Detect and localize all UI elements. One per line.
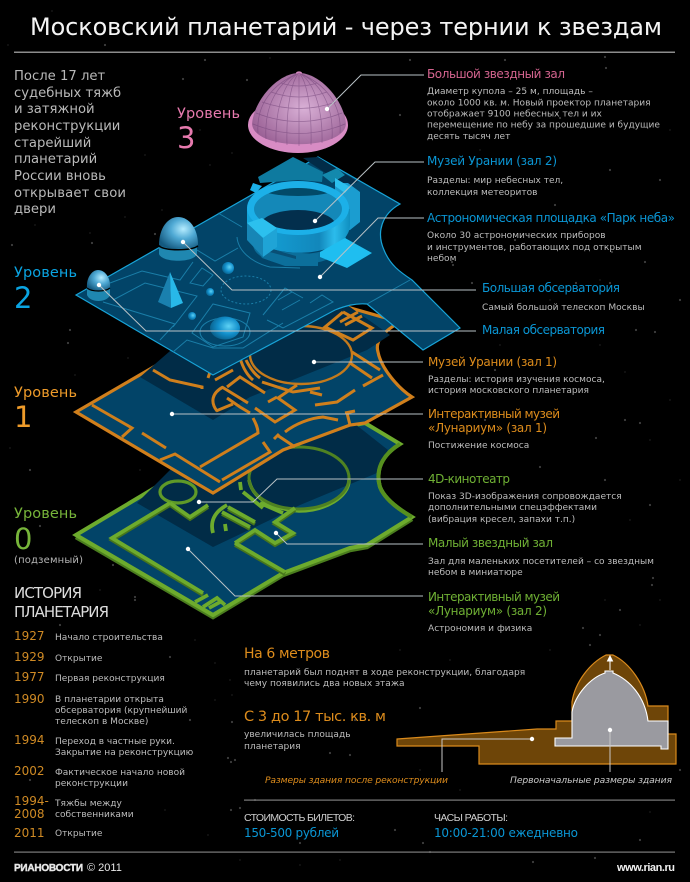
- callout: lunarium 2: [428, 590, 560, 634]
- history timeline: Закрытие на реконструкцию: [55, 748, 194, 758]
- fact: 6 metres: На 6 метров: [244, 646, 330, 662]
- level 0 label: 0: [14, 522, 32, 556]
- fact: 6 metres: планетарий был поднят в ходе реконструкции, благодаря: [244, 668, 525, 678]
- history timeline: Начало строительства: [55, 633, 163, 643]
- history timeline: 1929: [14, 650, 45, 664]
- fact: area: [244, 709, 386, 752]
- level 0 label: Уровень: [14, 506, 77, 522]
- history timeline: 1994: [14, 733, 45, 747]
- callout: small star hall: Малый звездный зал: [428, 536, 553, 550]
- level 2 label: [14, 265, 77, 315]
- history timeline: Фактическое начало новой: [55, 768, 185, 778]
- history timeline: 1927: [14, 629, 45, 643]
- level 1 plan: orange floor: [76, 300, 412, 493]
- footer url: www.rian.ru: [616, 862, 675, 874]
- callout: sky park: [427, 211, 675, 264]
- callout: urania hall 2: Разделы: мир небесных тел,: [427, 176, 563, 186]
- leader: big observatory: [181, 240, 476, 290]
- history timeline: собственниками: [55, 810, 134, 820]
- history timeline: обсерватория (крупнейший: [55, 706, 188, 716]
- opening hours: ЧАСЫ РАБОТЫ:: [434, 812, 508, 824]
- plan lines: [103, 213, 410, 352]
- callout: 4D: Показ 3D-изображения сопровождается: [428, 492, 622, 502]
- history heading: ИСТОРИЯ: [14, 584, 82, 602]
- callout: 4D: 4D-кинотеатр: [428, 472, 510, 486]
- orange walls: [92, 312, 383, 482]
- history timeline: телескоп в Москве): [55, 717, 148, 727]
- callout: big observatory: Большая обсерватория: [482, 281, 620, 295]
- callout: urania hall 1: история московского планетария: [428, 386, 589, 396]
- callout: 4D: [428, 472, 622, 525]
- intro text: и затяжной: [14, 102, 95, 117]
- level 3 label: 3: [177, 121, 195, 155]
- callout: urania hall 1: Разделы: история изучения космоса,: [428, 375, 605, 385]
- history timeline: Тяжбы между: [54, 799, 123, 809]
- history timeline: 2011: [14, 826, 45, 840]
- green walls: shaded side: [112, 505, 295, 595]
- level 0 label: (подземный): [14, 555, 83, 566]
- intro text: [14, 69, 126, 217]
- fact: 6 metres: [244, 646, 525, 689]
- level 1 label: [14, 385, 77, 434]
- level 2 label: Уровень: [14, 265, 77, 281]
- history timeline: [14, 629, 194, 840]
- intro text: судебных тяжб: [14, 85, 121, 101]
- intro text: двери: [14, 202, 56, 217]
- level 3 label: Уровень: [177, 106, 240, 122]
- title: Московский планетарий - через тернии к звездам: [30, 13, 662, 41]
- intro text: открывает свои: [14, 186, 126, 201]
- leader: urania hall 2: [313, 162, 424, 223]
- label: original size: Первоначальные размеры здания: [510, 775, 672, 786]
- callout: sky park: и инструментов, работающих под открытым: [427, 243, 642, 253]
- history timeline: 1990: [14, 692, 45, 706]
- callout: sky park: небом: [427, 254, 456, 264]
- building cross-section: [397, 655, 676, 764]
- level 0 label: [14, 506, 83, 566]
- callout: lunarium 2: «Лунариум» (зал 2): [428, 604, 547, 618]
- opening hours: 10:00-21:00 ежедневно: [434, 826, 578, 840]
- callout: lunarium 1: Интерактивный музей: [428, 407, 560, 421]
- fact: area: увеличилась площадь: [244, 730, 351, 740]
- level 1 label: 1: [14, 400, 32, 434]
- history timeline: Первая реконструкция: [55, 674, 165, 684]
- footer logo: РИАНОВОСТИ: [14, 863, 83, 874]
- leader: big star hall: [325, 75, 424, 111]
- level 0 plan: green floor: [76, 420, 412, 617]
- callout: lunarium 1: Постижение космоса: [428, 441, 529, 451]
- intro text: реконструкции: [14, 119, 120, 134]
- intro text: После 17 лет: [14, 69, 105, 84]
- history timeline: Открытие: [55, 654, 103, 664]
- leader: original size: [608, 728, 612, 772]
- label: size after reconstruction: Размеры здания после реконструкции: [265, 775, 448, 786]
- opening hours: [434, 812, 578, 840]
- callout: big observatory: Самый большой телескоп Москвы: [482, 303, 645, 313]
- callout: urania hall 2: Музей Урании (зал 2): [427, 154, 557, 168]
- history timeline: Переход в частные руки.: [55, 737, 175, 747]
- leader: lunarium 1: [170, 412, 423, 416]
- small observatory: [87, 270, 110, 301]
- callout: sky park: Астрономическая площадка «Парк неба»: [427, 211, 675, 225]
- history timeline: реконструкции: [55, 779, 128, 789]
- callout: big observatory: [482, 281, 645, 313]
- museum building: [247, 157, 372, 268]
- rule above tickets: [244, 800, 675, 801]
- leader: 4D: [197, 479, 423, 504]
- level 1 label: Уровень: [14, 385, 77, 401]
- fact: area: С 3 до 17 тыс. кв. м: [244, 709, 386, 725]
- callout: urania hall 2: [427, 154, 563, 198]
- callout: small star hall: [428, 536, 654, 578]
- leader: lunarium 2: [186, 547, 423, 596]
- callout: lunarium 1: «Лунариум» (зал 1): [428, 421, 547, 435]
- callout: urania hall 1: Музей Урании (зал 1): [428, 355, 557, 369]
- callout: big star hall: [427, 67, 660, 142]
- callout: big star hall: перемещение по небу за прошедшие и будущие: [427, 120, 660, 130]
- intro text: старейший: [14, 136, 91, 151]
- footer logo: © 2011: [87, 862, 122, 874]
- history timeline: В планетарии открыта: [55, 695, 164, 705]
- leader: small star hall: [274, 531, 423, 544]
- history timeline: Открытие: [55, 829, 103, 839]
- history timeline: 2008: [14, 807, 45, 821]
- callout: urania hall 2: коллекция метеоритов: [427, 188, 537, 198]
- green walls: [112, 482, 295, 608]
- intro text: России вновь: [14, 169, 106, 184]
- pyramid: [158, 272, 183, 308]
- intro text: планетарий: [14, 152, 97, 167]
- large observatory: [159, 217, 198, 261]
- dome: large star hall: [248, 71, 348, 153]
- arrow: raised by 6 metres: [608, 656, 612, 670]
- callout: lunarium 2: Астрономия и физика: [428, 624, 532, 634]
- callout: 4D: (вибрация кресел, запахи т.п.): [428, 515, 575, 525]
- callout: big star hall: Диаметр купола – 25 м, площадь –: [427, 87, 593, 97]
- callout: big star hall: десять тысяч лет: [427, 132, 510, 142]
- footer rule: [14, 852, 675, 853]
- callout: sky park: Около 30 астрономических приборов: [427, 231, 606, 241]
- level 3 label: [177, 106, 240, 155]
- ticket price: 150-500 рублей: [244, 826, 339, 840]
- callout: big star hall: отображает 9100 небесных тел и их: [427, 110, 603, 120]
- small spheres: [188, 262, 234, 320]
- fact: area: планетария: [244, 742, 301, 752]
- footer logo: [14, 862, 122, 874]
- fact: 6 metres: чему появились два новых этажа: [244, 679, 405, 689]
- callout: big star hall: Большой звездный зал: [427, 67, 565, 81]
- level 2 plan: blue floor: [76, 157, 460, 375]
- callout: 4D: дополнительными спецэффектами: [428, 503, 597, 513]
- callout: big star hall: около 1000 кв. м. Новый проектор планетария: [427, 98, 651, 108]
- ticket price: СТОИМОСТЬ БИЛЕТОВ:: [244, 812, 355, 824]
- callout: urania hall 1: [428, 355, 605, 396]
- leader: urania hall 1: [312, 360, 423, 364]
- callout: small observatory: Малая обсерватория: [482, 323, 605, 337]
- history heading: [14, 584, 109, 621]
- leader: small observatory: [97, 283, 476, 331]
- history heading: ПЛАНЕТАРИЯ: [14, 603, 109, 621]
- leader: sky park: [318, 218, 424, 279]
- title rule: [14, 52, 675, 53]
- callout: small star hall: Зал для маленьких посетителей – со звездным: [428, 557, 654, 567]
- history timeline: 1977: [14, 670, 45, 684]
- callout: lunarium 1: [428, 407, 560, 451]
- level 2 label: 2: [14, 281, 32, 315]
- central half dome: [210, 316, 240, 340]
- callout: lunarium 2: Интерактивный музей: [428, 590, 560, 604]
- history timeline: 1994-: [14, 794, 49, 808]
- leader: size after reconstruction: [442, 737, 534, 772]
- ticket price: [244, 812, 355, 840]
- history timeline: 2002: [14, 764, 45, 778]
- callout: small star hall: небом в миниатюре: [428, 568, 523, 578]
